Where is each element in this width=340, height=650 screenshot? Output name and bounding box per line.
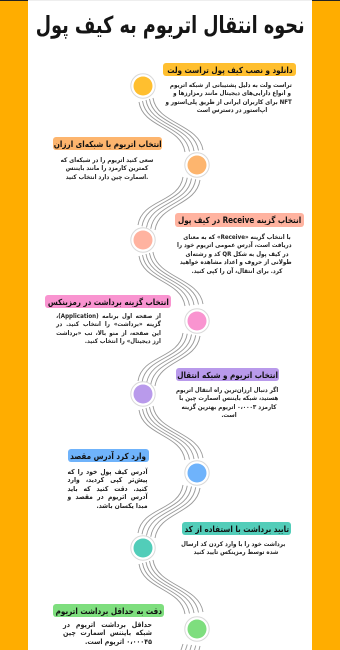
step 4 xyxy=(45,295,171,345)
step 3 text: کرد. برای انتقال، آن را کپی کنید. xyxy=(192,268,282,275)
step 8 heading: دقت به حداقل برداشت اتریوم xyxy=(55,606,162,616)
step 3 heading xyxy=(175,213,304,227)
step 4 text: از صفحه اول برنامه (Application)، xyxy=(56,313,161,320)
step 1 text: تراست ولت به دلیل پشتیبانی از شبکه اتریوم xyxy=(170,82,292,89)
step 5 xyxy=(176,368,279,419)
wave connector 1 xyxy=(139,98,203,152)
step 3 text: دریافت است، آدرس عمومی اتریوم خود را xyxy=(177,242,292,249)
step 6 text: پیش‌تر کپی کردید، وارد xyxy=(67,476,147,484)
step 1 text xyxy=(165,82,292,114)
title: نحوه انتقال اتریوم به کیف پول xyxy=(36,11,304,39)
step 3 heading: انتخاب گزینه Receive در کیف پول xyxy=(178,215,301,225)
step 7 text xyxy=(181,541,285,556)
step 4 text: این صفحه، از منو بالا، تب «برداشت xyxy=(56,330,161,337)
step 1 text: NFT برای کاربران ایرانی از طریق پلی‌استور و xyxy=(165,99,292,106)
node 8 xyxy=(185,617,209,641)
step 8 text: حداقل برداشت اتریوم در xyxy=(63,620,152,629)
step 8 text xyxy=(62,620,152,646)
step 7 text: شده توسط رمزینکس تایید کنید xyxy=(194,549,278,556)
step 5 text: است. xyxy=(221,412,237,419)
step 7 heading: تایید برداشت با استفاده از کد xyxy=(184,524,289,534)
step 4 text xyxy=(56,313,161,345)
step 6 text: کنید. دقت کنید که باید xyxy=(67,485,147,493)
step 3 text: طولانی از حروف و اعداد مشاهده خواهید xyxy=(180,259,292,266)
node 1 xyxy=(131,74,155,98)
step 5 text: هستید، شبکه بایننس اسمارت چین با xyxy=(179,395,278,402)
step 4 text: ارز دیجیتال» را انتخاب کنید. xyxy=(85,338,161,345)
step 4 text: گزینه «برداشت» را انتخاب کنید. در xyxy=(56,321,161,328)
step 2 text: .اسمارت چین دارد انتخاب کنید xyxy=(66,174,148,181)
step 1 text: اپ‌استور در دسترس است xyxy=(197,107,267,114)
step 3 text: در کیف پول به شکل QR کد و رشته‌ای xyxy=(185,251,289,258)
step 3 text: با انتخاب گزینه «Receive» که به معنای xyxy=(183,234,291,241)
wave connector 5 xyxy=(139,406,203,460)
step 4 heading: انتخاب گزینه برداشت در رمزینکس xyxy=(48,296,168,306)
step 2 text: کمترین کارمزد را مانند بایننس xyxy=(66,165,148,172)
step 1 xyxy=(163,63,296,114)
step 8 text: ۰،۰۰۰۴۵ اتریوم است. xyxy=(85,637,152,646)
step 6 text xyxy=(67,468,148,510)
step 6 text: آدرس کیف پول خود را که xyxy=(67,468,147,476)
node 6 xyxy=(185,461,209,485)
wave connector 7 xyxy=(139,560,203,614)
step 8 xyxy=(53,604,164,646)
step 5 heading: انتخاب اتریوم و شبکه انتقال xyxy=(177,370,278,380)
step 6 heading: وارد کرد آدرس مقصد xyxy=(71,450,146,460)
wave connector 3 xyxy=(139,252,203,306)
step 1 heading: دانلود و نصب کیف پول تراست ولت xyxy=(167,64,292,74)
step 2 text xyxy=(61,157,153,181)
wave connector 6 xyxy=(138,485,200,538)
step 8 text: شبکه بایننس اسمارت چین xyxy=(63,628,152,637)
node 3 xyxy=(131,228,155,252)
node 5 xyxy=(131,382,155,406)
wave connector 8 xyxy=(181,644,200,650)
wave connector 4 xyxy=(138,333,200,386)
step 6 xyxy=(67,449,149,510)
wave connector 2 xyxy=(138,177,200,230)
step 2 xyxy=(53,137,162,181)
step 3 text xyxy=(177,233,292,275)
step 3 xyxy=(175,213,304,275)
step 5 text: اگر دنبال ارزان‌ترین راه انتقال اتریوم xyxy=(176,387,278,394)
node 4 xyxy=(185,309,209,333)
step 6 text: مبدا یکسان باشد. xyxy=(96,502,147,510)
step 5 text xyxy=(176,386,278,419)
step 7 xyxy=(181,522,291,556)
step 7 text: برداشت خود را با وارد کردن کد ارسال xyxy=(181,541,285,548)
node 2 xyxy=(185,153,209,177)
node 7 xyxy=(131,536,155,560)
step 2 text: سعی کنید اتریوم را در شبکه‌ای که xyxy=(61,157,153,164)
step 6 text: آدرس اتریوم در مقصد و xyxy=(67,493,147,501)
step 2 heading: انتخاب اتریوم با شبکه‌ای ارزان xyxy=(54,138,161,148)
step 5 text: کارمزد ۰،۰۰۰۳ اتریوم بهترین گزینه xyxy=(182,404,276,411)
step 1 text: و انواع دارایی‌های دیجیتال مانند رمزارزها و xyxy=(173,90,291,97)
